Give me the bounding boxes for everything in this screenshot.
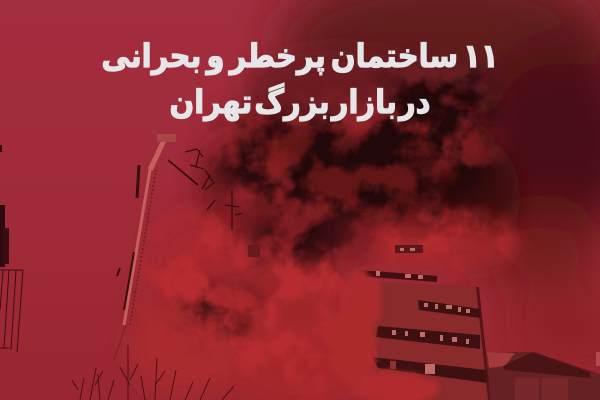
title	[101, 37, 499, 122]
smoke plume base	[130, 50, 520, 400]
title line 2: در بازار بزرگ تهران	[169, 83, 431, 121]
smoke in front of building	[328, 272, 437, 400]
light smoke texture	[145, 97, 515, 390]
dark smoke texture	[180, 65, 500, 328]
fire ladder	[114, 134, 198, 360]
building facade	[352, 245, 491, 400]
window bands	[358, 245, 487, 383]
debris and structure lines	[185, 149, 260, 257]
left foreground balcony	[0, 145, 23, 352]
dark smoke on upper right	[280, 0, 600, 365]
neighbouring building on right	[487, 352, 600, 400]
bare trees at bottom	[72, 345, 234, 400]
title line 1: ۱۱ ساختمان پرخطر و بحرانی	[101, 37, 499, 75]
